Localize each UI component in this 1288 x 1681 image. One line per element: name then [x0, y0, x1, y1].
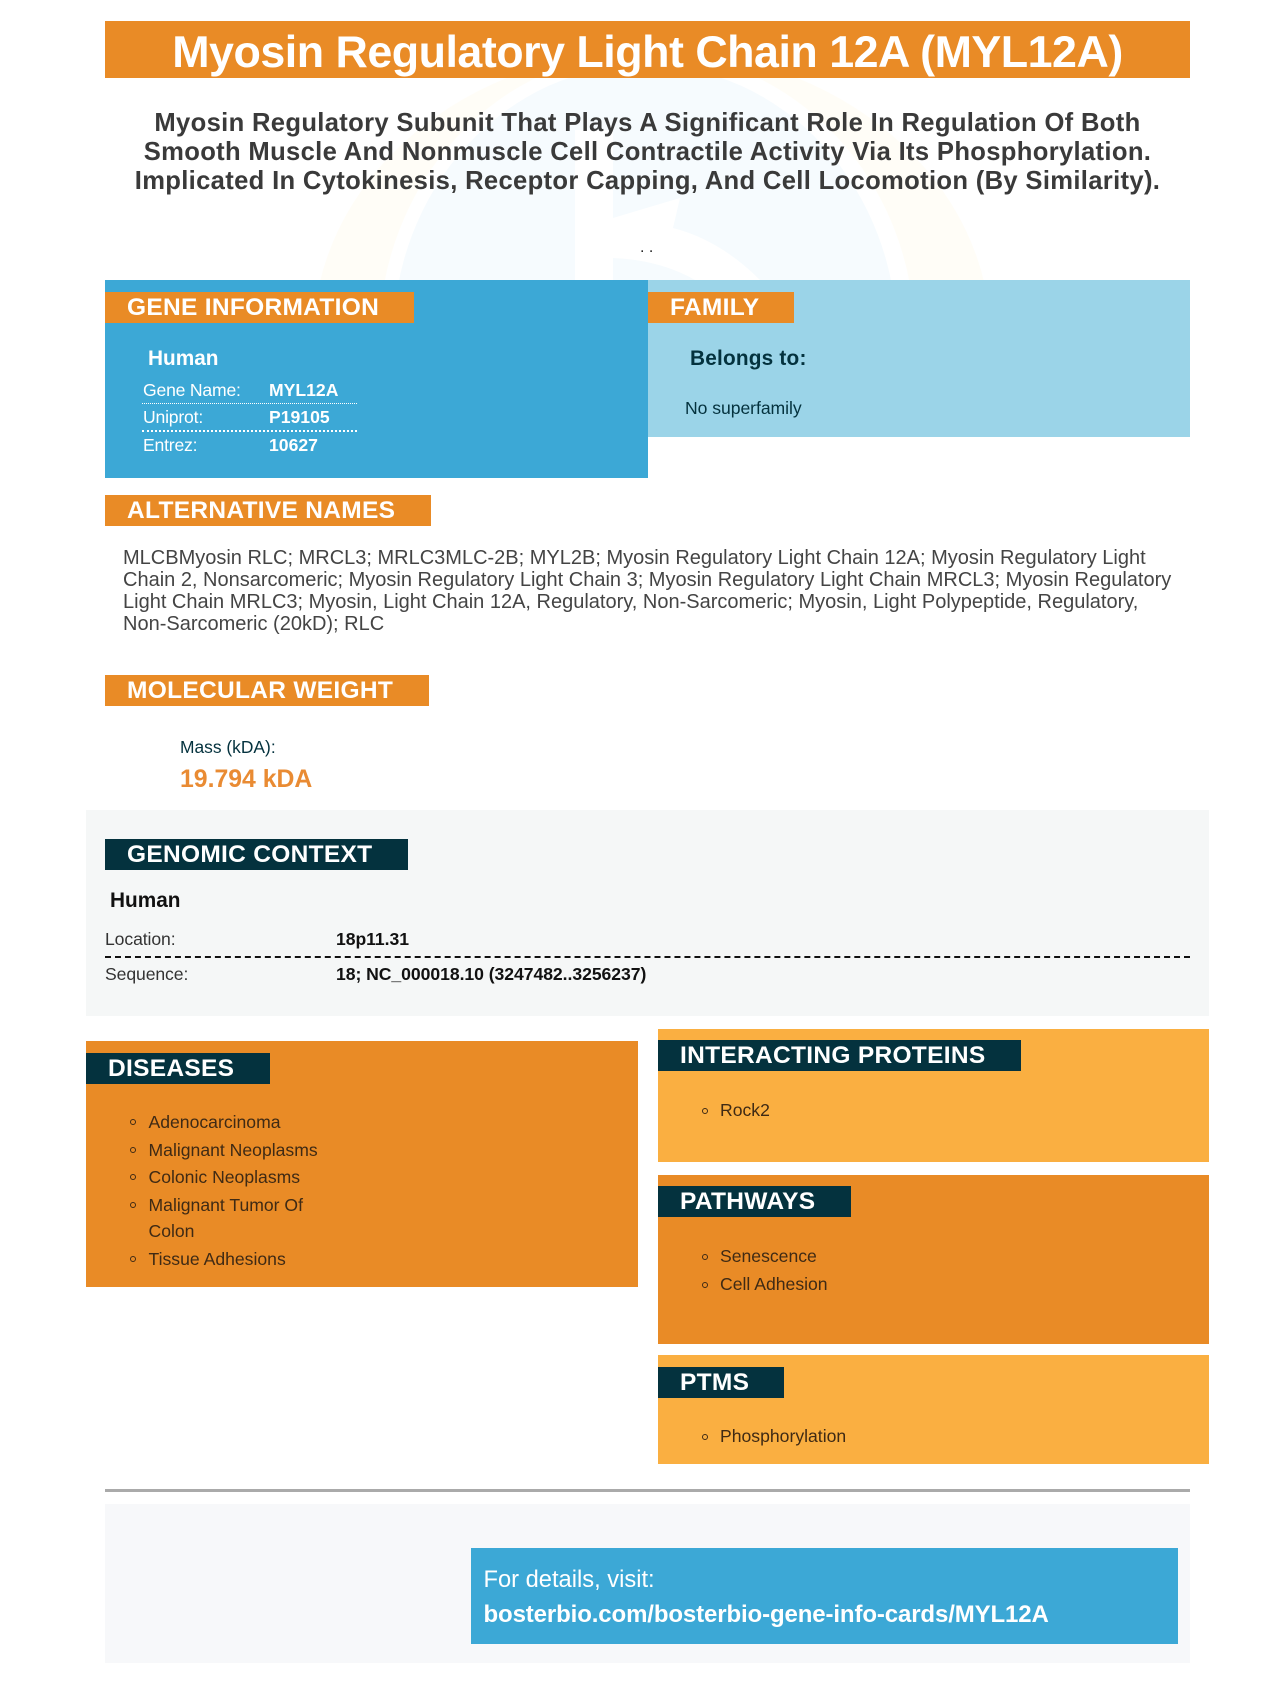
panel: gene information [105, 280, 648, 478]
gene name row [143, 380, 338, 400]
heading: pathways: PATHWAYS [680, 1188, 815, 1215]
uniprot row: P19105 [269, 407, 330, 427]
pathways list: Cell Adhesion [720, 1274, 828, 1294]
subtitle description: Implicated In Cytokinesis, Receptor Capping, And Cell Locomotion (By Similarity). [135, 167, 1160, 195]
subtitle description: Myosin Regulatory Subunit That Plays A Significant Role In Regulation Of Both [154, 109, 1141, 137]
location row: 18p11.31 [336, 929, 409, 949]
title banner: Myosin Regulatory Light Chain 12A (MYL12A) [172, 27, 1123, 77]
entrez row: Entrez: [143, 435, 197, 455]
alternative names text: Chain 2, Nonsarcomeric; Myosin Regulatory Light Chain 3; Myosin Regulatory Light Chain MRCL3; Myosin Regulatory [123, 569, 1171, 591]
heading: family [648, 292, 794, 323]
diseases list: Adenocarcinoma [148, 1112, 281, 1132]
panel: footer [105, 1504, 1190, 1663]
mass value: 19.794 kDA [180, 766, 312, 793]
species label: Human [110, 889, 180, 912]
diseases list: Malignant Neoplasms [148, 1140, 318, 1160]
url: bosterbio.com/bosterbio-gene-info-cards/MYL12A [484, 1601, 1049, 1628]
alternative names text: Non-Sarcomeric (20kD); RLC [123, 613, 384, 635]
diseases list: Malignant Tumor Of [148, 1195, 303, 1215]
uniprot row: Uniprot: [143, 407, 203, 427]
no superfamily text: No superfamily [685, 398, 802, 418]
heading: diseases [86, 1053, 270, 1084]
sequence row: 18; NC_000018.10 (3247482..3256237) [336, 964, 646, 984]
heading: genomic context: GENOMIC CONTEXT [127, 841, 372, 868]
panel: ptms [658, 1355, 1209, 1464]
entrez row [143, 435, 318, 455]
belongs to label: Belongs to: [690, 347, 807, 370]
pathways list: Senescence [720, 1246, 817, 1266]
diseases list [130, 1112, 318, 1269]
heading: interacting proteins: INTERACTING PROTEINS [680, 1042, 985, 1069]
heading: gene information: GENE INFORMATION [127, 294, 379, 321]
species label: Human [148, 347, 218, 370]
mass label: Mass (kDA): [180, 737, 276, 757]
diseases list: Tissue Adhesions [148, 1249, 286, 1269]
heading: diseases: DISEASES [108, 1055, 234, 1082]
diseases list: Colonic Neoplasms [148, 1167, 300, 1187]
location row [105, 929, 409, 949]
panel: diseases [86, 1041, 638, 1287]
heading: family: FAMILY [670, 294, 759, 321]
small dots text: . . [640, 239, 653, 256]
diseases list: Colon [148, 1221, 194, 1241]
heading: alternative names: ALTERNATIVE NAMES [127, 497, 395, 524]
entrez row: 10627 [269, 435, 318, 455]
visit label: For details, visit: [484, 1567, 655, 1593]
interacting proteins list: Rock2 [720, 1100, 770, 1120]
subtitle description: Smooth Muscle And Nonmuscle Cell Contractile Activity Via Its Phosphorylation. [144, 138, 1151, 166]
heading: molecular weight: MOLECULAR WEIGHT [127, 677, 393, 704]
callout: details link [471, 1548, 1178, 1644]
watermark logo [400, 78, 890, 280]
heading: ptms: PTMS [680, 1369, 749, 1396]
gene name row: MYL12A [269, 380, 338, 400]
pathways list [702, 1246, 828, 1294]
ptms list: Phosphorylation [720, 1426, 846, 1446]
uniprot row [143, 407, 330, 427]
panel: genomic context [86, 810, 1209, 1016]
panel: pathways [658, 1175, 1209, 1344]
alternative names text: Light Chain MRLC3; Myosin, Light Chain 12A, Regulatory, Non-Sarcomeric; Myosin, Light Polypeptide, Regulatory, [123, 591, 1138, 613]
gene name row: Gene Name: [143, 380, 241, 400]
subtitle description [135, 109, 1160, 195]
sequence row: Sequence: [105, 964, 188, 984]
alternative names text [123, 547, 1172, 635]
panel: family [648, 280, 1190, 437]
heading: ptms [658, 1367, 784, 1398]
panel: interacting proteins [658, 1029, 1209, 1162]
heading: pathways [658, 1186, 851, 1217]
alternative names text: MLCBMyosin RLC; MRCL3; MRLC3MLC-2B; MYL2B; Myosin Regulatory Light Chain 12A; Myosin Regulatory Light [123, 547, 1146, 569]
sequence row [105, 964, 646, 984]
location row: Location: [105, 929, 176, 949]
